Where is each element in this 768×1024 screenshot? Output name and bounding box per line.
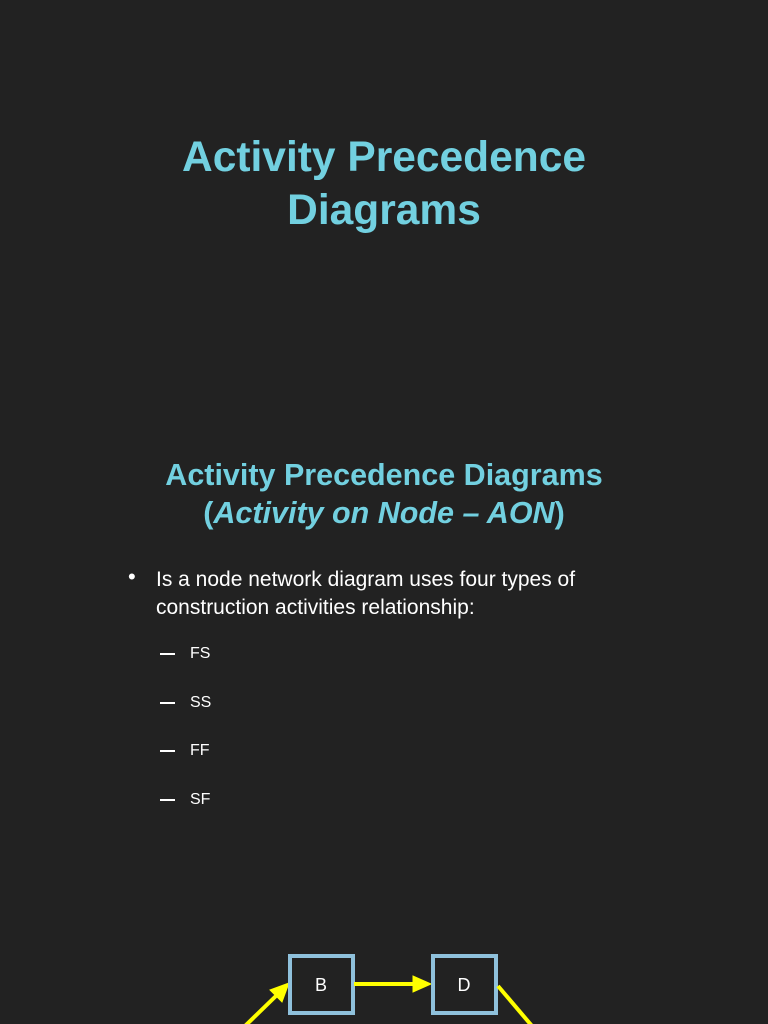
arrow into B	[245, 983, 289, 1024]
bullet text: Is a node network diagram uses four types of	[156, 568, 575, 591]
arrow from D	[498, 986, 532, 1024]
node D	[433, 956, 496, 1013]
sub-list: FS	[190, 645, 210, 662]
node D: D	[458, 975, 470, 995]
bullet text: construction activities relationship:	[156, 596, 475, 619]
bullet text: •	[128, 564, 136, 589]
arrow B to D	[354, 976, 431, 992]
title: Diagrams	[287, 187, 481, 234]
sub-list	[160, 645, 211, 808]
bullet text	[128, 564, 576, 619]
sub-list: SF	[190, 791, 210, 808]
subtitle heading: Activity Precedence Diagrams	[165, 458, 603, 492]
sub-list: SS	[190, 694, 211, 711]
sub-list: FF	[190, 742, 210, 759]
title: Activity Precedence	[182, 134, 586, 181]
node B	[290, 956, 353, 1013]
title	[182, 134, 586, 234]
node B: B	[315, 975, 327, 995]
subtitle heading: (Activity on Node – AON)	[203, 496, 565, 530]
subtitle heading	[165, 458, 603, 530]
